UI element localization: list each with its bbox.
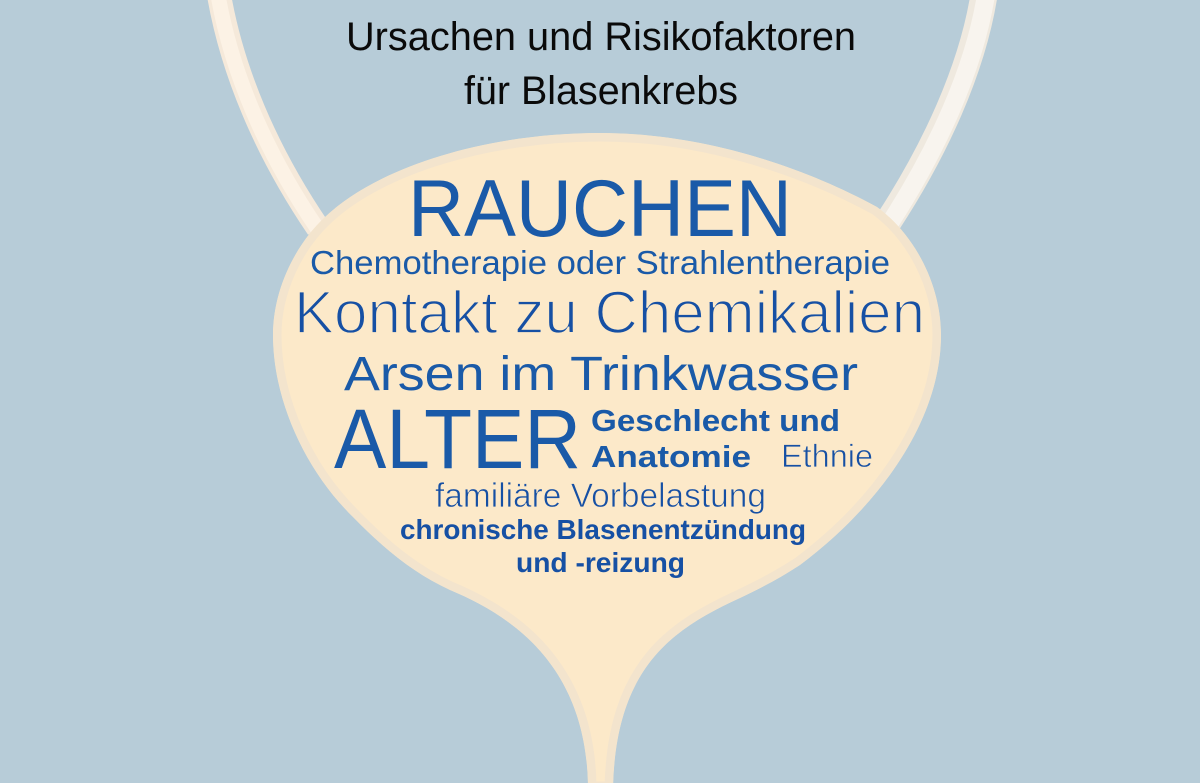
word: Geschlecht und Anatomie: Anatomie <box>591 439 751 474</box>
word: chronische Blasenentzündung und -reizung <box>400 514 806 578</box>
word: Chemotherapie oder Strahlentherapie: Chemotherapie oder Strahlentherapie <box>310 244 890 281</box>
title <box>346 15 856 113</box>
right ureter tube <box>888 0 986 223</box>
word: Rauchen: RAUCHEN <box>408 164 792 254</box>
title: Ursachen und Risikofaktoren <box>346 15 856 59</box>
risk factor word cloud <box>294 164 925 578</box>
title: für Blasenkrebs <box>464 69 738 113</box>
left ureter tube <box>218 0 318 228</box>
word: Geschlecht und Anatomie <box>591 403 840 474</box>
word: Geschlecht und Anatomie: Geschlecht und <box>591 403 840 438</box>
word: familiäre Vorbelastung: familiäre Vorbelastung <box>435 477 766 515</box>
word: Ethnie: Ethnie <box>781 438 873 474</box>
word: chronische Blasenentzündung und -reizung: und -reizung <box>516 547 685 578</box>
word: chronische Blasenentzündung und -reizung: chronische Blasenentzündung <box>400 514 806 545</box>
word: Kontakt zu Chemikalien: Kontakt zu Chemikalien <box>294 279 925 346</box>
bladder shape <box>273 133 941 783</box>
word: Arsen im Trinkwasser: Arsen im Trinkwasser <box>344 348 858 401</box>
word: Alter: ALTER <box>334 392 581 486</box>
